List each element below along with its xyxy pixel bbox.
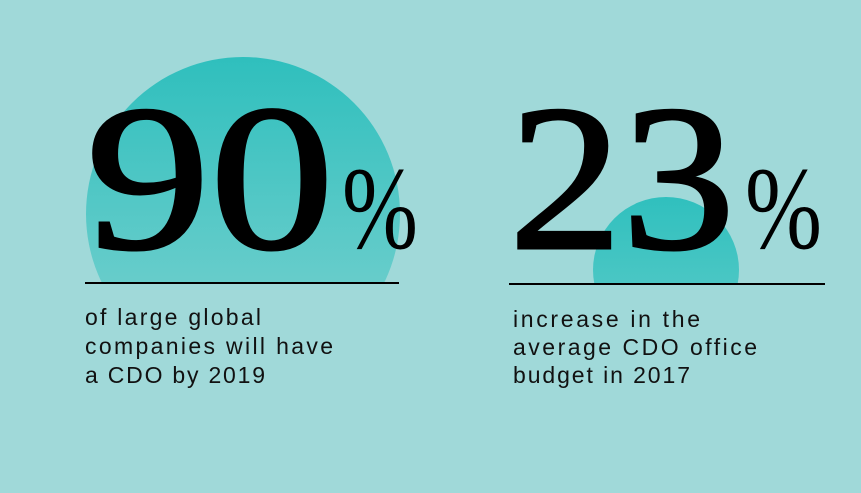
caption right: budget in 2017	[513, 362, 690, 388]
circle: right	[593, 197, 739, 283]
caption right	[513, 306, 757, 388]
caption left: of large global	[85, 304, 261, 330]
big number 23: 23	[509, 63, 735, 293]
caption left: a CDO by 2019	[85, 362, 265, 388]
caption left	[85, 304, 333, 388]
caption right: increase in the	[513, 306, 700, 332]
stat panel: 90%	[85, 57, 418, 388]
infographic	[85, 57, 825, 388]
big number 90: 90	[86, 63, 334, 293]
caption left: companies will have	[85, 333, 333, 359]
caption right: average CDO office	[513, 334, 757, 360]
percent sign: %	[342, 143, 418, 274]
circle: left	[86, 57, 400, 282]
stat panel: 23%	[509, 108, 825, 388]
percent sign: %	[745, 143, 822, 274]
